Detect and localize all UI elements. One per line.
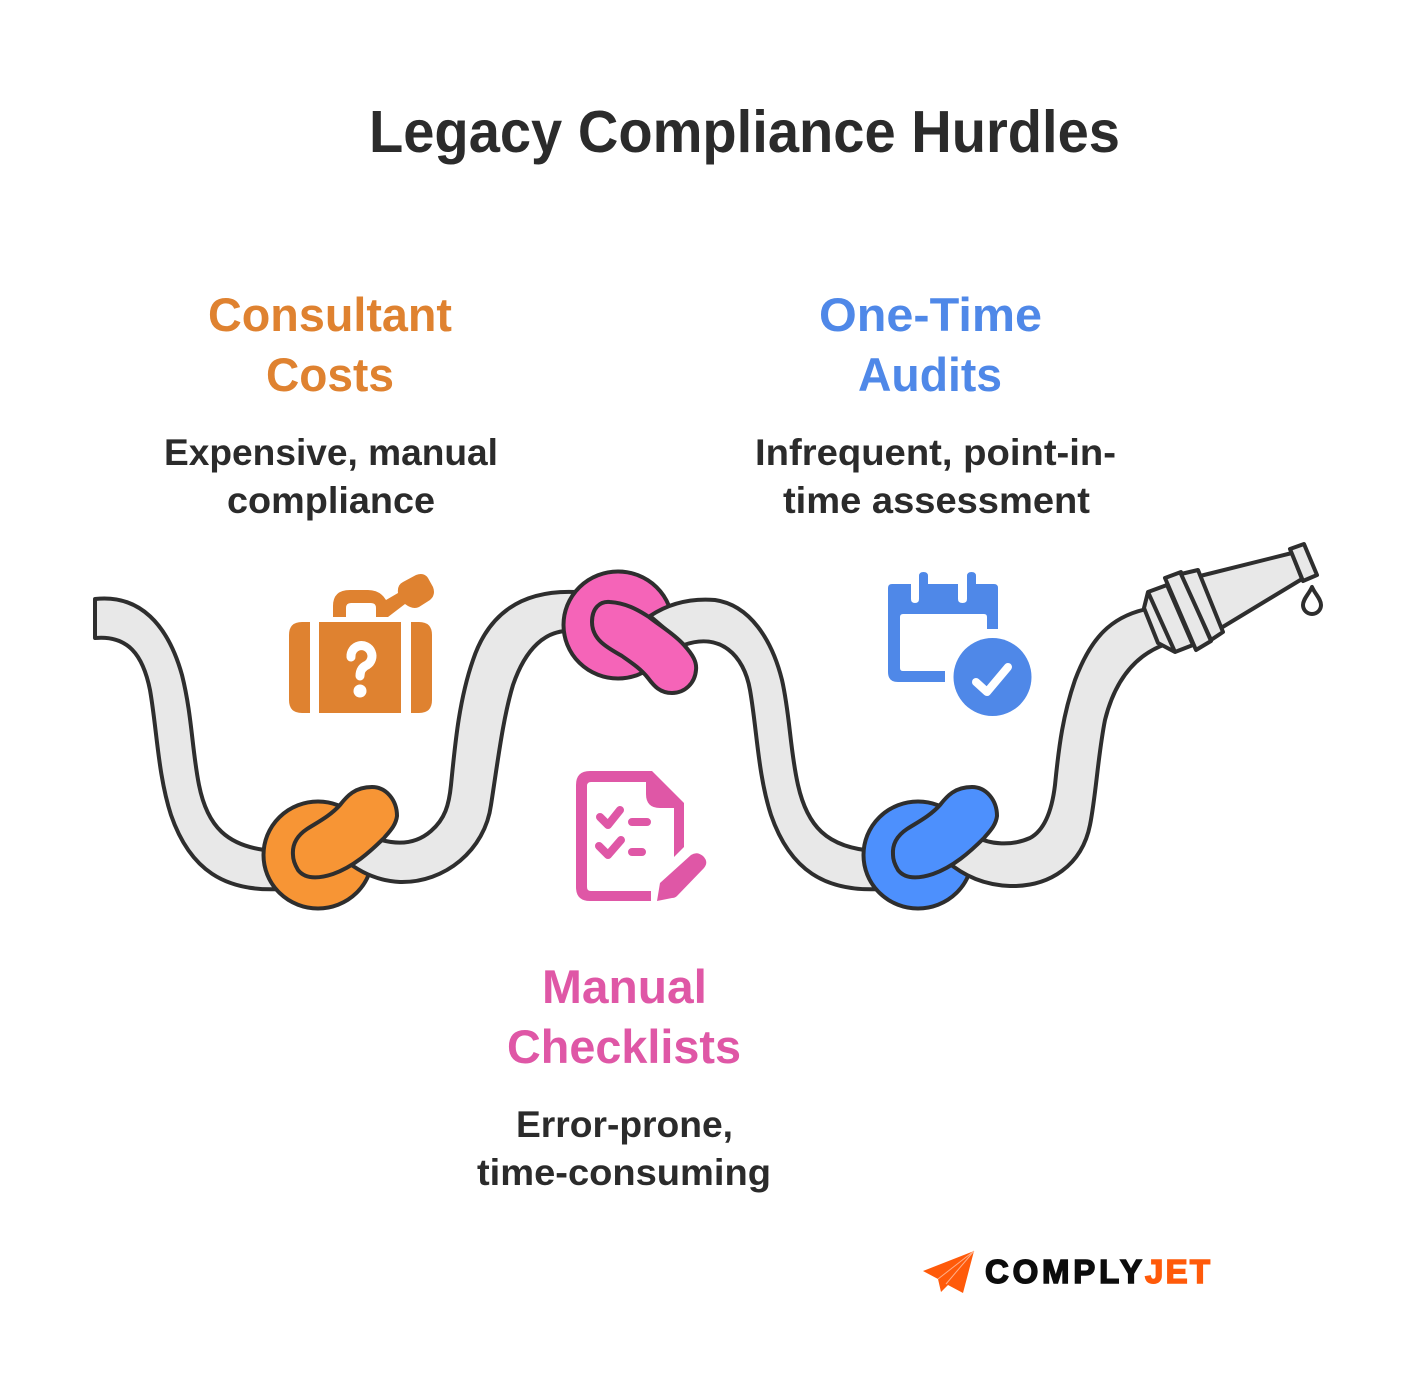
wordmark [985, 1253, 1210, 1290]
description: consultant costs: compliance [227, 480, 435, 521]
heading: one-time audits: One-Time [819, 288, 1042, 341]
knot ring: orange [264, 802, 372, 908]
icon: checklist with pen [576, 771, 706, 901]
knot ring: pink [564, 572, 672, 678]
icon: calendar with check [888, 572, 1032, 716]
description: one-time audits: Infrequent, point-in- [755, 432, 1116, 473]
heading: consultant costs: Consultant [208, 288, 452, 341]
knot bean: blue [893, 787, 997, 877]
hose section 2 [345, 592, 575, 882]
wordmark: JET [1145, 1253, 1210, 1290]
text block: one-time audits [755, 288, 1116, 521]
heading: consultant costs [208, 288, 452, 401]
knot bean: pink [592, 602, 696, 693]
heading: manual checklists: Manual [542, 960, 707, 1013]
water drop [1303, 587, 1321, 614]
nozzle [1144, 544, 1317, 652]
heading: consultant costs: Costs [266, 348, 394, 401]
icon: paper plane [923, 1251, 974, 1293]
description: one-time audits: time assessment [783, 480, 1090, 521]
heading: one-time audits [819, 288, 1042, 401]
description: manual checklists: Error-prone, [516, 1104, 733, 1145]
hose section 1 [95, 598, 280, 889]
heading: one-time audits: Audits [858, 348, 1002, 401]
hose section 4 [945, 608, 1166, 886]
knot ring: blue [864, 802, 972, 908]
description: manual checklists: time-consuming [477, 1152, 771, 1193]
heading: manual checklists [507, 960, 741, 1073]
logo: complyjet [923, 1251, 1210, 1293]
text block: consultant costs [164, 288, 498, 521]
description: consultant costs [164, 432, 498, 521]
wordmark: COMPLY [985, 1253, 1142, 1290]
heading: manual checklists: Checklists [507, 1020, 741, 1073]
icon: suitcase with question mark [289, 574, 434, 713]
description: one-time audits [755, 432, 1116, 521]
description: manual checklists [477, 1104, 771, 1193]
title: Legacy Compliance Hurdles [369, 99, 1120, 165]
text block: manual checklists [477, 960, 771, 1193]
description: consultant costs: Expensive, manual [164, 432, 498, 473]
hose section 3 [650, 600, 880, 889]
knot bean: orange [293, 787, 397, 877]
hose illustration with knots and nozzle [95, 544, 1321, 908]
